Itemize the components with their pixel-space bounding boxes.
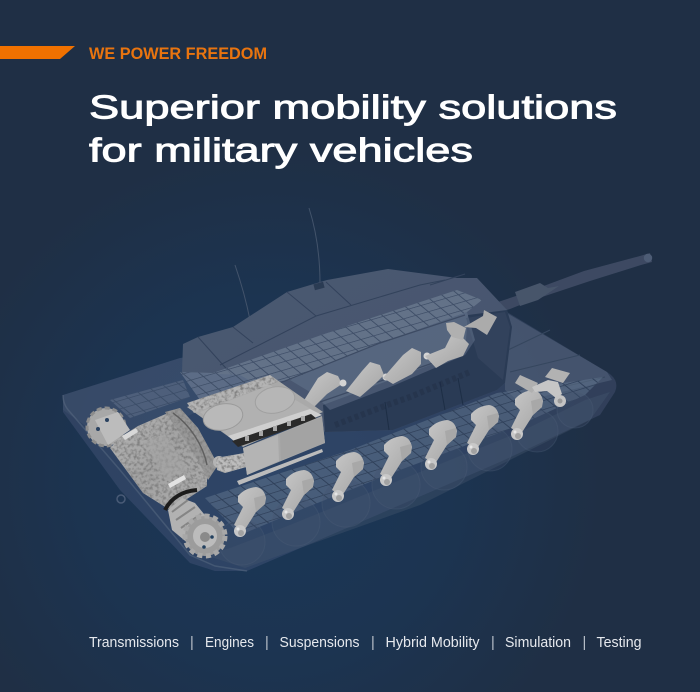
front sprocket xyxy=(165,490,225,556)
transmission xyxy=(110,408,250,510)
footer capability list: Transmissions xyxy=(89,635,179,651)
title: Superior mobility solutions xyxy=(89,88,617,126)
title xyxy=(89,88,617,168)
tank illustration xyxy=(63,208,652,571)
rear sprocket xyxy=(87,408,130,446)
hull xyxy=(63,312,616,571)
lower suspension arms xyxy=(234,390,543,537)
upper suspension arms xyxy=(303,310,497,408)
antennas xyxy=(235,208,320,372)
footer capability list: Testing xyxy=(596,635,642,651)
footer capability list: | xyxy=(582,635,586,651)
upper track xyxy=(180,290,482,425)
gun barrel xyxy=(495,253,652,313)
footer capability list: Hybrid Mobility xyxy=(386,635,480,651)
footer capability list: | xyxy=(190,635,194,651)
lower track xyxy=(205,377,610,568)
front suspension bracket xyxy=(515,368,570,407)
footer capability list xyxy=(89,635,642,651)
footer capability list: | xyxy=(371,635,375,651)
footer capability list: Engines xyxy=(205,635,254,651)
footer capability list: | xyxy=(265,635,269,651)
title: for military vehicles xyxy=(89,132,473,168)
road wheels xyxy=(219,392,593,565)
power pack xyxy=(187,375,325,485)
footer capability list: Suspensions xyxy=(280,635,360,651)
eyebrow heading: WE POWER FREEDOM xyxy=(89,45,267,63)
footer capability list: Simulation xyxy=(505,635,571,651)
turret xyxy=(182,269,512,432)
footer capability list: | xyxy=(491,635,495,651)
orange accent bar xyxy=(0,46,75,59)
